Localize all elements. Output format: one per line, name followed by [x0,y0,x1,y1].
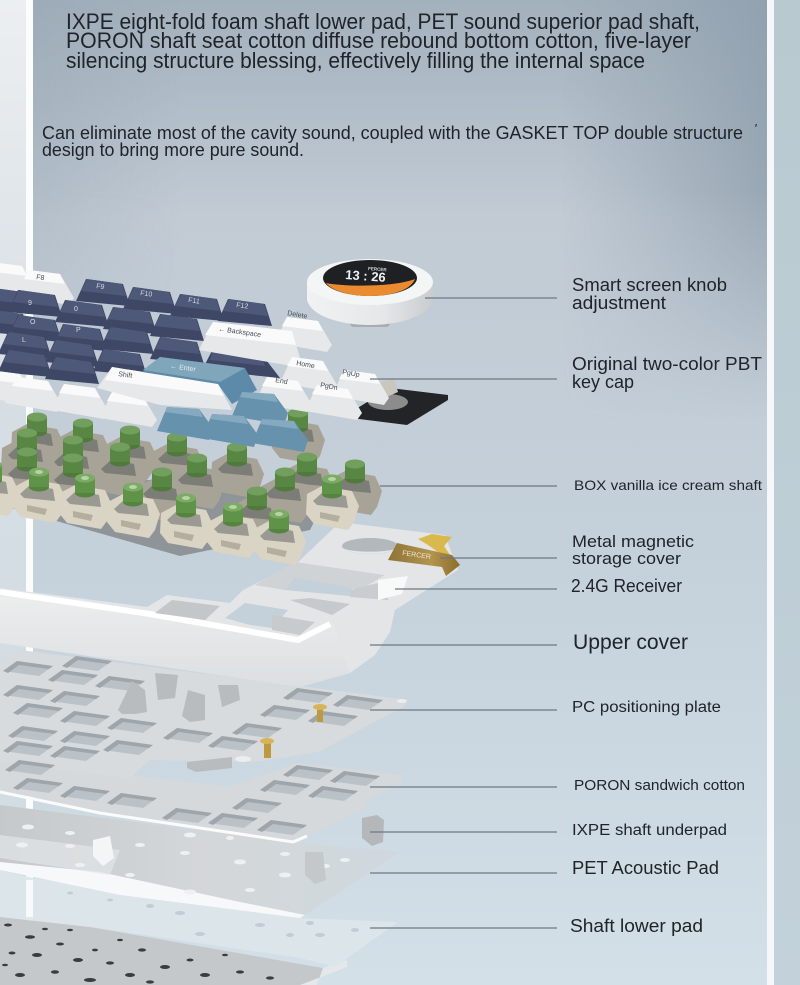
label: storage cover: storage cover [572,550,682,568]
label: keycap: Original two-color PBT [572,354,762,374]
label: PET: PET Acoustic Pad [572,857,719,878]
shift and enter keys: ← Enter [170,363,197,374]
heading text: PORON shaft seat cotton diffuse rebound bottom cotton, five-layer [66,28,691,53]
intro paragraph: design to bring more pure sound. [42,140,304,160]
upper cover [0,522,458,687]
navy keys: O [30,319,36,326]
white edge keys: Delete [287,310,308,321]
intro paragraph: ' [754,121,757,136]
layer: IXPE shaft underpad [0,805,400,918]
label: keycap [370,354,762,392]
switches [0,408,382,565]
heading text [66,9,700,73]
label: receiver: 2.4G Receiver [571,576,682,596]
shift and enter keys: Shift [118,371,133,380]
stabilizers between pads [93,815,384,884]
white edge keys: Home [296,360,315,370]
metal magnetic storage cover: FERCER [402,550,431,561]
white edge keys: End [275,377,288,386]
keycaps [0,262,389,452]
label: PORON: PORON sandwich cotton [574,778,745,794]
layer: PET acoustic pad [0,870,398,967]
heading text: IXPE eight-fold foam shaft lower pad, PET sound superior pad shaft, [66,9,700,34]
label: shaft lower pad: Shaft lower pad [570,916,703,936]
callout labels [370,274,762,936]
intro paragraph [42,121,757,160]
smart screen knob: 13 : 26 [345,267,386,285]
white edge keys: PgUp [342,369,360,379]
navy keys: 9 [28,300,32,307]
smart screen knob: FERCER [368,266,387,272]
layer: PORON sandwich cotton [0,760,402,842]
navy keys: F11 [188,297,200,306]
label: storage cover: Metal magnetic [572,533,694,551]
navy keys [0,279,280,384]
intro paragraph: Can eliminate most of the cavity sound, coupled with the GASKET TOP double structure [42,123,743,143]
navy keys: P [76,327,81,334]
label: smart screen knob: adjustment [572,292,666,313]
brass screws [260,704,327,758]
label: keycap: key cap [572,372,634,392]
white edge keys: PgDn [320,382,338,392]
label: PC plate: PC positioning plate [572,699,721,716]
black PCB plate [343,378,448,425]
plate clips [118,673,240,722]
navy keys: F10 [140,290,153,299]
heading text: silencing structure blessing, effectively filling the internal space [66,48,645,73]
white function keys [0,262,74,305]
white edge keys [0,310,389,427]
grey base plate under switches [0,480,320,556]
label: storage cover [440,533,694,568]
label: upper cover: Upper cover [573,631,688,654]
layer: shaft lower pad base [0,917,347,985]
blue arrow keys [157,392,308,452]
label: IXPE: IXPE shaft underpad [572,822,727,839]
white function keys: F8 [36,274,45,282]
navy keys: L [22,337,26,344]
white edge keys: ← Backspace [218,326,262,339]
label: smart screen knob [425,274,727,313]
shift and enter keys [97,357,257,410]
label: smart screen knob: Smart screen knob [572,274,727,295]
navy keys: 0 [74,306,78,313]
smart screen knob [307,259,433,327]
navy keys: F12 [236,302,249,311]
navy keys: F9 [96,283,105,291]
layer: PC positioning plate [0,650,408,778]
metal magnetic storage cover [388,534,460,576]
label: switch: BOX vanilla ice cream shaft [574,477,762,493]
